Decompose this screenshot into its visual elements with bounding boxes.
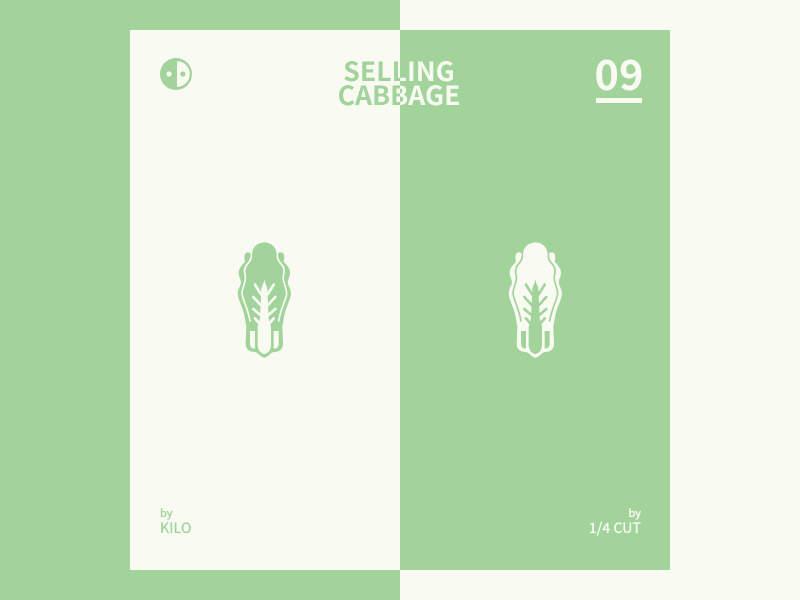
icon: cabbage, left bbox=[238, 242, 291, 358]
title: green portion: CABBAGE bbox=[338, 74, 460, 113]
caption: by KILO: KILO bbox=[160, 518, 192, 538]
caption: by KILO bbox=[160, 505, 192, 538]
caption: by 1/4 CUT: 1/4 CUT bbox=[589, 518, 641, 538]
icon: half circle face logo bbox=[160, 58, 192, 90]
icon: cabbage, right bbox=[508, 242, 562, 358]
panel: left cream card bbox=[130, 30, 400, 570]
background: left green half bbox=[0, 0, 400, 600]
number 09 with underline: 09 bbox=[594, 42, 643, 102]
caption: by 1/4 CUT: by bbox=[628, 505, 641, 521]
title: green portion bbox=[339, 61, 400, 106]
panel: right green card bbox=[400, 30, 670, 570]
title: cream portion: CABBAGE bbox=[338, 74, 460, 113]
caption: by KILO: by bbox=[160, 505, 172, 521]
caption: by 1/4 CUT bbox=[589, 505, 641, 538]
title: cream portion bbox=[400, 61, 459, 106]
title: cream portion: SELLING bbox=[343, 50, 455, 89]
background: right cream half bbox=[400, 0, 800, 600]
title: green portion: SELLING bbox=[343, 50, 455, 89]
